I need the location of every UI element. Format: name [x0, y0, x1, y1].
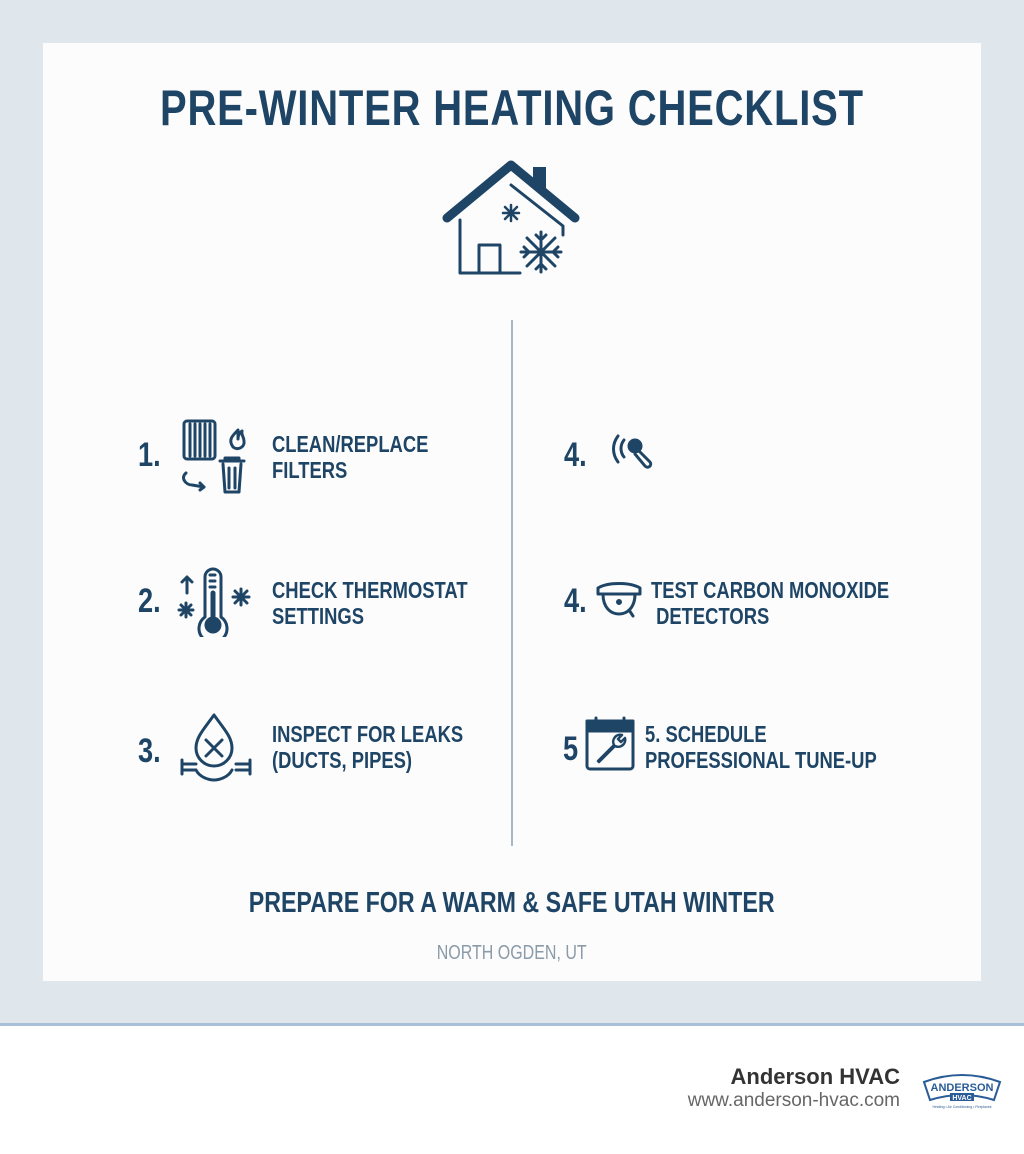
footer brand: www.anderson-hvac.com [688, 1090, 900, 1111]
item 4b [564, 577, 889, 629]
title: PRE-WINTER HEATING CHECKLIST [160, 80, 864, 136]
icon: leak drop with pipe [180, 713, 252, 782]
text: 5 [563, 730, 578, 768]
text 3: (DUCTS, PIPES) [272, 747, 412, 773]
item 1 [138, 420, 428, 494]
text 4 [651, 577, 889, 629]
footer brand [688, 1064, 900, 1111]
item 4a [564, 434, 652, 474]
text: 1. [138, 436, 161, 474]
icon: house with snowflakes [442, 160, 580, 274]
icon: filter, flame, trash [182, 420, 246, 494]
logo [922, 1074, 1002, 1109]
icon: sensor signal [612, 434, 652, 469]
text 5 [645, 721, 877, 773]
text: 4. [564, 436, 587, 474]
text 5: 5. SCHEDULE [645, 721, 767, 747]
item 2 [138, 568, 468, 637]
text 2: SETTINGS [272, 603, 364, 629]
text: 4. [564, 582, 587, 620]
footer brand: Anderson HVAC [730, 1064, 900, 1089]
text 2: CHECK THERMOSTAT [272, 577, 468, 603]
item 5 [563, 716, 877, 773]
logo: ANDERSON [931, 1082, 994, 1094]
text 2 [272, 577, 468, 629]
item 3 [138, 713, 463, 782]
text 3 [272, 721, 463, 773]
text: 3. [138, 732, 161, 770]
text 1 [272, 431, 428, 483]
text 1: CLEAN/REPLACE [272, 431, 428, 457]
logo: HVAC [952, 1095, 972, 1102]
text 4: TEST CARBON MONOXIDE [651, 577, 889, 603]
text 1: FILTERS [272, 457, 347, 483]
text 4: DETECTORS [656, 603, 769, 629]
tagline: PREPARE FOR A WARM & SAFE UTAH WINTER [249, 887, 775, 919]
icon: calendar wrench [586, 716, 634, 770]
text 3: INSPECT FOR LEAKS [272, 721, 463, 747]
divider [511, 320, 513, 846]
location: NORTH OGDEN, UT [437, 942, 587, 964]
icon: CO detector [596, 582, 642, 618]
text: 2. [138, 582, 161, 620]
text 5: PROFESSIONAL TUNE-UP [645, 747, 877, 773]
icon: thermometer [178, 568, 250, 637]
footer divider [0, 1023, 1024, 1026]
logo: Heating • Air Conditioning • Fireplaces [932, 1105, 992, 1109]
